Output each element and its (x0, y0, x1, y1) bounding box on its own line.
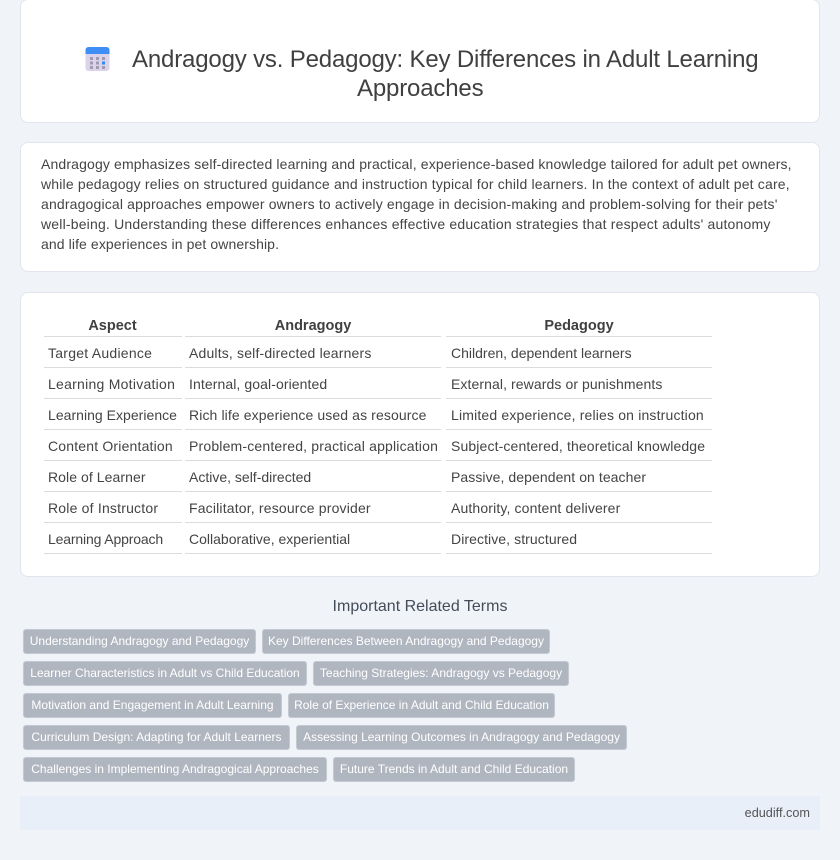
row: Learning Approach: Learning Approach (48, 531, 163, 547)
title (132, 46, 758, 102)
table header row: Andragogy (275, 318, 351, 334)
tag: Assessing Learning Outcomes in Andragogy and Pedagogy (303, 730, 620, 744)
text block: introduction: and life experiences in pet ownership. (41, 236, 279, 252)
row: Role of Instructor: Role of Instructor (48, 500, 158, 516)
row: Target Audience (48, 345, 632, 361)
tag: Curriculum Design: Adapting for Adult Learners (31, 730, 282, 744)
footer text: edudiff.com (745, 806, 810, 820)
row: Content Orientation: Content Orientation (48, 438, 173, 454)
row: Target Audience: Children, dependent learners (451, 345, 632, 361)
row: Content Orientation (48, 438, 705, 454)
tag: Motivation and Engagement in Adult Learning (31, 698, 274, 712)
row: Learning Experience: Learning Experience (48, 407, 177, 423)
row: Role of Learner: Active, self-directed (189, 469, 311, 485)
row: Role of Learner (48, 469, 646, 485)
row: Role of Learner: Role of Learner (48, 469, 146, 485)
tag: Challenges in Implementing Andragogical Approaches (31, 762, 319, 776)
text block: introduction: Andragogy emphasizes self-directed learning and practical, experience-based knowledge tailored for adult pet owners, (41, 156, 792, 172)
text block: introduction: andragogical approaches empower owners to actively engage in decision-making and problem-solving for their pets' (41, 196, 778, 212)
row: Role of Instructor: Authority, content deliverer (451, 500, 620, 516)
icon: calendar (86, 47, 110, 71)
row: Target Audience: Adults, self-directed learners (189, 345, 372, 361)
tag (23, 693, 282, 718)
tag (23, 725, 290, 750)
tag: Key Differences Between Andragogy and Pedagogy (268, 634, 544, 648)
heading: important related terms: Important Related Terms (333, 598, 507, 615)
tag: Teaching Strategies: Andragogy vs Pedagogy (320, 666, 562, 680)
row: Target Audience: Target Audience (48, 345, 152, 361)
tag (313, 661, 569, 686)
tag (23, 661, 307, 686)
row: Learning Experience (48, 407, 704, 423)
table header row: Pedagogy (544, 318, 614, 334)
tag: Future Trends in Adult and Child Education (340, 762, 568, 776)
tag (296, 725, 627, 750)
row: Learning Experience: Limited experience, relies on instruction (451, 407, 704, 423)
tag: Role of Experience in Adult and Child Education (294, 698, 549, 712)
tag group: related terms (23, 629, 627, 782)
row: Learning Approach: Directive, structured (451, 531, 577, 547)
tag (288, 693, 555, 718)
row: Role of Learner: Passive, dependent on teacher (451, 469, 646, 485)
tag: Learner Characteristics in Adult vs Child Education (30, 666, 300, 680)
row: Role of Instructor (48, 500, 620, 516)
text block: introduction (41, 156, 792, 252)
text block: introduction: while pedagogy relies on structured guidance and instruction typical for child learners. In the context of adult pet care, (41, 176, 790, 192)
text block: introduction: well-being. Understanding these differences enhances effective education strategies that respect adults' autonomy (41, 216, 771, 232)
panel: introduction (20, 142, 820, 272)
row: Learning Motivation: Learning Motivation (48, 376, 175, 392)
table header row (88, 318, 614, 334)
row: Learning Experience: Rich life experience used as resource (189, 407, 427, 423)
row: Content Orientation: Problem-centered, practical application (189, 438, 438, 454)
tag (262, 629, 550, 654)
row: Role of Instructor: Facilitator, resource provider (189, 500, 371, 516)
row: Learning Motivation (48, 376, 662, 392)
row: Learning Motivation: External, rewards or punishments (451, 376, 662, 392)
tag (23, 629, 256, 654)
footer bar (20, 796, 820, 830)
panel: comparison table (20, 292, 820, 577)
row: Learning Motivation: Internal, goal-oriented (189, 376, 327, 392)
panel: header (20, 0, 820, 123)
row: Learning Approach (48, 531, 577, 547)
tag (23, 757, 327, 782)
row: Learning Approach: Collaborative, experiential (189, 531, 350, 547)
table header row: Aspect (88, 318, 137, 334)
title: Andragogy vs. Pedagogy: Key Differences in Adult Learning (132, 46, 758, 73)
tag (333, 757, 575, 782)
tag: Understanding Andragogy and Pedagogy (30, 634, 249, 648)
row: Content Orientation: Subject-centered, theoretical knowledge (451, 438, 705, 454)
title: Approaches (357, 75, 483, 102)
